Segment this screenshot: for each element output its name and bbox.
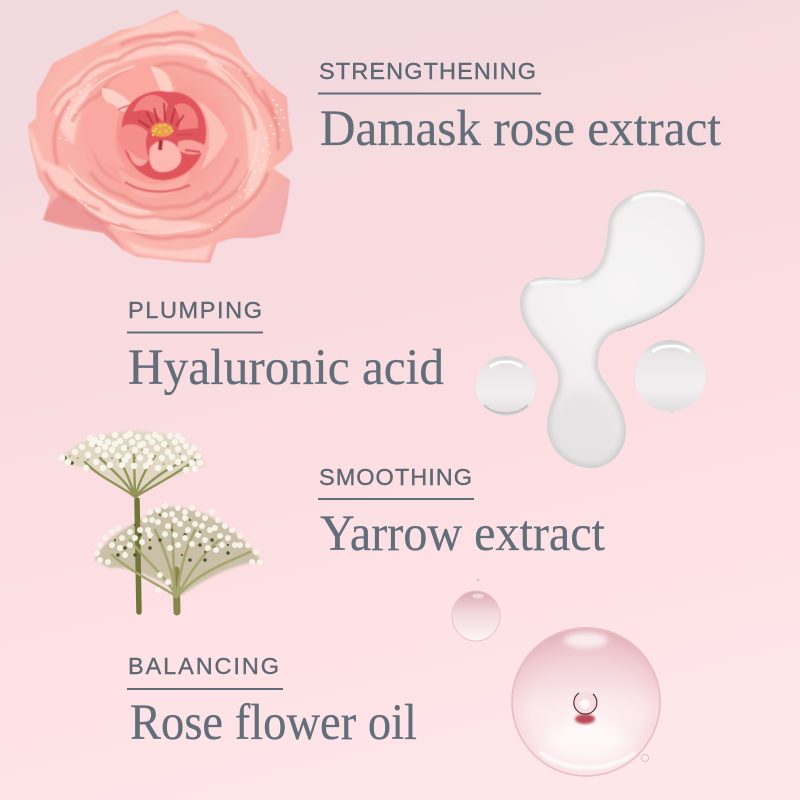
upper flower cluster <box>62 434 200 470</box>
cluster underlay <box>60 431 205 495</box>
heart of the rose <box>118 91 210 180</box>
icon: damask rose <box>28 10 293 263</box>
icon: large oil droplet <box>511 627 661 777</box>
icon: hyaluronic acid serum <box>520 190 705 468</box>
heading: Damask rose extract: Damask rose extract <box>320 101 721 157</box>
heading: Rose flower oil: Rose flower oil <box>130 695 417 751</box>
petal shadow folds <box>45 33 278 238</box>
label: PLUMPING: PLUMPING <box>128 297 262 323</box>
heading: Yarrow extract: Yarrow extract <box>320 506 605 562</box>
light outer petals <box>30 12 269 260</box>
icon: small oil droplet <box>452 578 500 641</box>
inner petal ring <box>82 66 228 198</box>
icon: serum droplet left <box>476 356 536 416</box>
dew droplets <box>60 70 284 230</box>
stems <box>85 455 250 612</box>
darker lower outer petals <box>43 194 125 250</box>
icon: yarrow plant <box>60 431 262 612</box>
lower flower cluster <box>97 506 260 590</box>
label: STRENGTHENING: STRENGTHENING <box>319 58 536 84</box>
stamens <box>151 123 173 137</box>
heading: Hyaluronic acid: Hyaluronic acid <box>128 340 444 396</box>
icon: serum droplet right <box>635 340 706 414</box>
dark foliage <box>65 458 228 560</box>
label: BALANCING: BALANCING <box>128 653 279 679</box>
label: SMOOTHING: SMOOTHING <box>319 464 472 490</box>
